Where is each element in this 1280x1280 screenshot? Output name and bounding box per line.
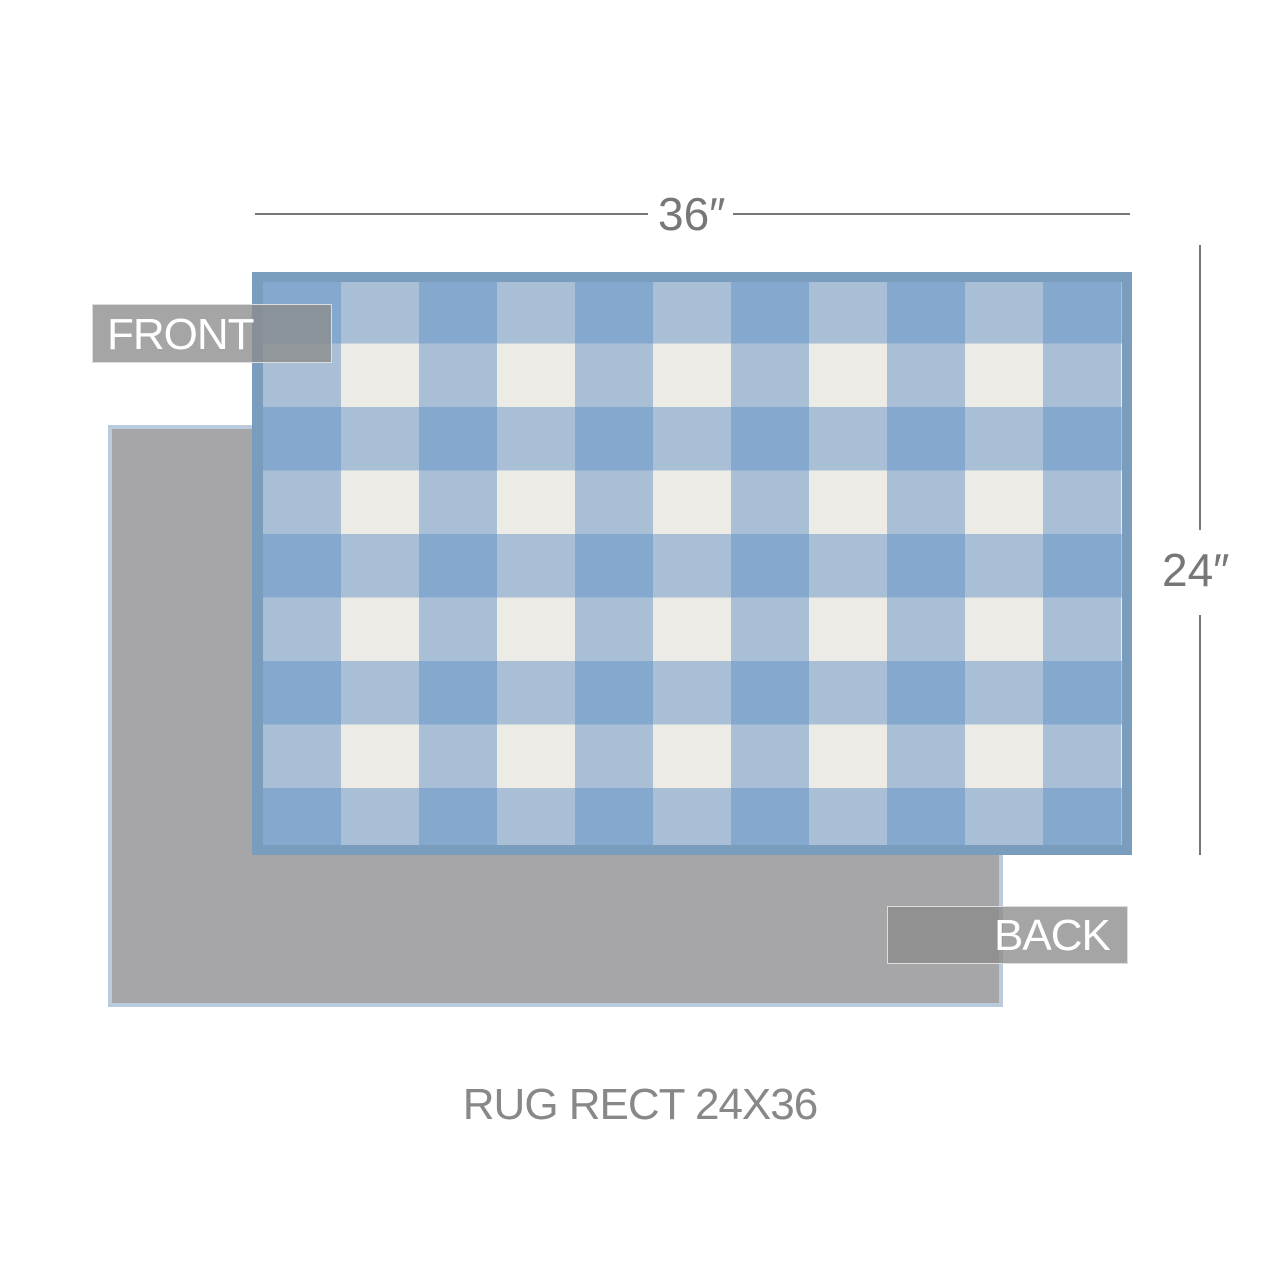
dimension: height 24: 24″ — [1162, 544, 1229, 596]
label: BACK: BACK — [994, 911, 1110, 960]
label: FRONT: FRONT — [107, 310, 254, 359]
front rug gingham — [252, 272, 1132, 855]
back rug — [108, 425, 1003, 1007]
title: RUG RECT 24X36 — [463, 1080, 817, 1129]
label: BACK — [887, 906, 1128, 964]
dimension: width 36: 36″ — [658, 188, 725, 240]
label: FRONT — [92, 304, 332, 363]
